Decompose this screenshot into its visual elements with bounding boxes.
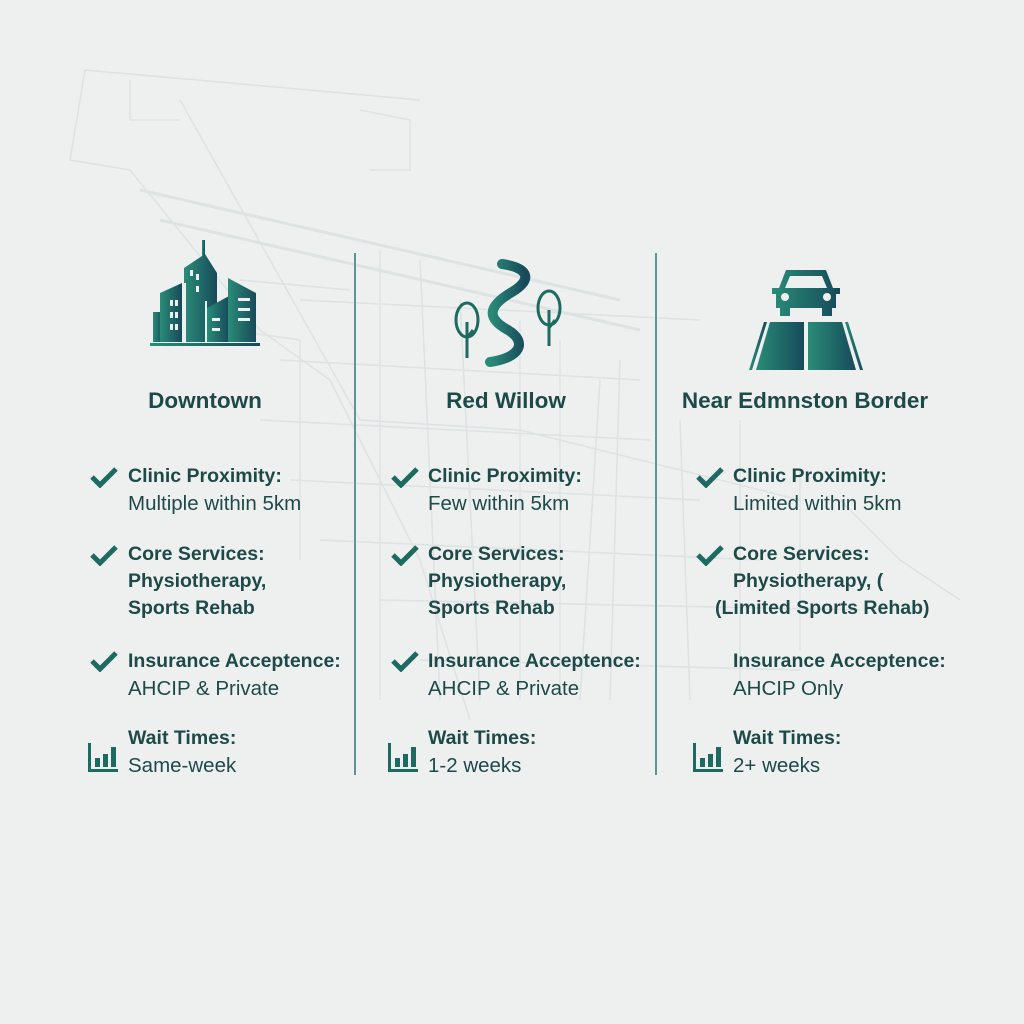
column: Near Edmnston Border: AHCIP Only	[733, 677, 843, 700]
column: Downtown: Wait Times:	[128, 727, 236, 749]
column: Red Willow: Clinic Proximity:	[428, 465, 582, 487]
icon: car on road	[749, 270, 863, 370]
column: Downtown: Same-week	[128, 754, 236, 777]
column: Red Willow: Wait Times:	[428, 727, 536, 749]
column: Downtown: Insurance Acceptence:	[128, 650, 341, 672]
column: Near Edmnston Border	[693, 465, 946, 777]
heading: Red Willow: Red Willow	[446, 388, 566, 413]
icon: river with trees	[454, 259, 562, 367]
column: Downtown: Clinic Proximity:	[128, 465, 282, 487]
column: Red Willow: Physiotherapy,	[428, 570, 566, 592]
column: Red Willow: Insurance Acceptence:	[428, 650, 641, 672]
column: Downtown	[88, 465, 341, 777]
column: Downtown: Physiotherapy,	[128, 570, 266, 592]
column: Near Edmnston Border: Wait Times:	[733, 727, 841, 749]
column: Near Edmnston Border: (Limited Sports Rehab)	[715, 597, 930, 619]
column: Near Edmnston Border: Core Services:	[733, 543, 870, 565]
icon: city buildings	[150, 240, 260, 346]
check icon	[90, 467, 118, 488]
column: Red Willow: Core Services:	[428, 543, 565, 565]
column: Red Willow: Few within 5km	[428, 492, 569, 515]
column: Near Edmnston Border: Insurance Acceptence:	[733, 650, 946, 672]
heading: Downtown: Downtown	[148, 388, 262, 413]
column: Near Edmnston Border: 2+ weeks	[733, 754, 820, 777]
column: Downtown: Sports Rehab	[128, 597, 255, 619]
divider lines	[354, 253, 356, 775]
column: Near Edmnston Border: Limited within 5km	[733, 492, 902, 515]
column: Near Edmnston Border: Clinic Proximity:	[733, 465, 887, 487]
column: Red Willow: AHCIP & Private	[428, 677, 579, 700]
column: Red Willow	[388, 465, 641, 777]
column: Red Willow: Sports Rehab	[428, 597, 555, 619]
column: Downtown: Core Services:	[128, 543, 265, 565]
column: Near Edmnston Border: Physiotherapy, (	[733, 570, 883, 592]
column: Downtown: AHCIP & Private	[128, 677, 279, 700]
column: Red Willow: 1-2 weeks	[428, 754, 521, 777]
heading: Near Edmnston Border: Near Edmnston Border	[682, 388, 928, 413]
column: Downtown: Multiple within 5km	[128, 492, 301, 515]
